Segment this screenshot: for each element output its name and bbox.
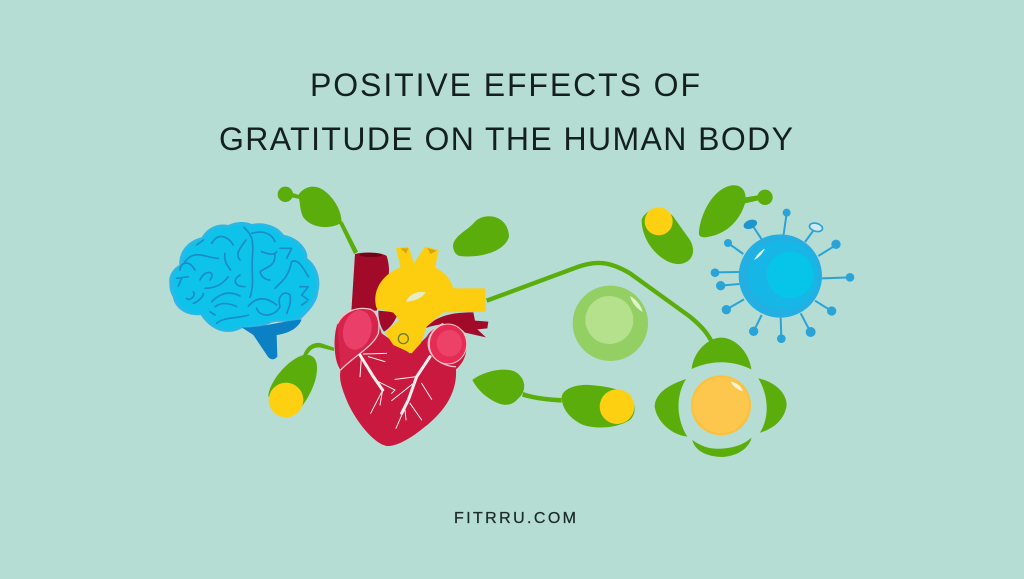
connector: green line from aorta to cell: [487, 263, 712, 342]
title: [219, 67, 793, 157]
leaf: top centre: [453, 216, 509, 256]
title: GRATITUDE ON THE HUMAN BODY: [219, 121, 793, 157]
icon: brain: [169, 222, 319, 359]
footer url: FITRRU.COM: [454, 510, 576, 527]
capsule: lower middle with leaf: [472, 370, 635, 428]
leaf: top right with knob: [699, 185, 773, 237]
icon: heart: [335, 307, 467, 446]
left illustration: brain and heart: [169, 187, 488, 446]
stem and leaf to heart: [278, 187, 358, 254]
title: POSITIVE EFFECTS OF: [310, 67, 700, 103]
capsule: top: [642, 207, 693, 264]
icon: central yellow cell with petals: [655, 338, 787, 457]
icon: virus cell: [711, 209, 854, 343]
icon: yellow aorta: [375, 247, 486, 353]
capsule: lower left: [268, 343, 334, 417]
icon: great vessels behind heart: [351, 252, 488, 337]
right illustration: cells, capsules and virus: [453, 185, 854, 457]
icon: green sphere: [573, 286, 648, 361]
